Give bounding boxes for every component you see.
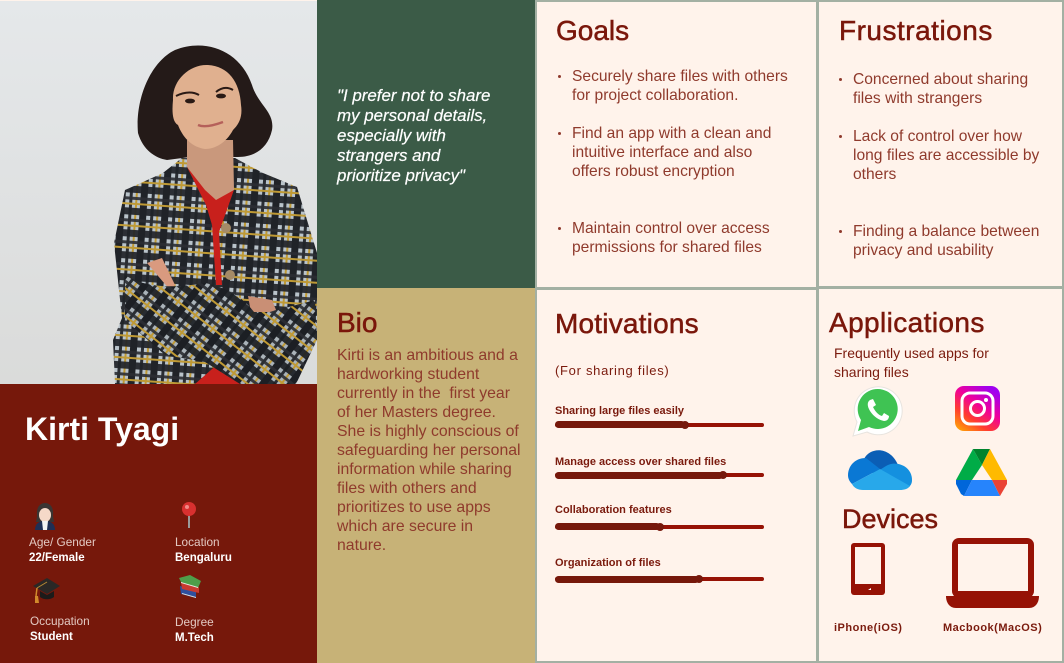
bio text: safeguarding her personal [337, 442, 521, 459]
slider: collaboration: Collaboration features [555, 504, 672, 516]
quote text: my personal details, [337, 106, 487, 125]
frustrations heading: Frustrations [839, 15, 993, 46]
quote text: especially with [337, 126, 446, 145]
bio text: files with others and [337, 480, 477, 497]
name: Kirti Tyagi [25, 411, 179, 447]
bio text: currently in the first year [337, 385, 510, 402]
applications subtitle [834, 345, 989, 380]
slider: organization [555, 557, 764, 583]
slider: sharing large files: Sharing large files easily [555, 405, 684, 417]
goal 3 [558, 220, 770, 256]
occupation [30, 614, 90, 643]
degree: M.Tech [175, 632, 214, 644]
frustration 1 [839, 71, 1028, 107]
panel: quote [317, 0, 535, 288]
frustration 2: others [853, 166, 896, 183]
frustration 2 [839, 128, 1040, 183]
degree: Degree [175, 615, 214, 629]
panel: frustrations [817, 0, 1064, 288]
photo: portrait of Kirti [0, 1, 317, 384]
quote text [336, 86, 490, 185]
motivations heading: Motivations [555, 308, 699, 339]
occupation: Occupation [30, 614, 90, 628]
devices heading: Devices [842, 504, 938, 534]
bio text: which are secure in [337, 518, 473, 535]
occupation: Student [30, 631, 73, 643]
goal 1 [558, 68, 788, 104]
location: Bengaluru [175, 552, 232, 564]
bio text: of her Masters degree. [337, 404, 496, 421]
bio text [337, 347, 521, 554]
icon: woman [35, 503, 55, 530]
icon: books [179, 575, 201, 598]
slider: sharing large files [555, 405, 764, 429]
icon: location pin [182, 502, 196, 528]
slider: manage access: Manage access over shared files [555, 456, 726, 468]
goal 3: Maintain control over access [572, 220, 770, 237]
bio text: nature. [337, 537, 386, 554]
frustration 3: Finding a balance between [853, 223, 1039, 240]
goal 2: intuitive interface and also [572, 144, 752, 161]
quote text: prioritize privacy" [337, 166, 465, 185]
goal 2 [558, 125, 771, 180]
age and gender: Age/ Gender [29, 535, 96, 549]
icon: Google Drive [956, 449, 1007, 496]
Macbook label: Macbook(MacOS) [943, 622, 1042, 634]
age and gender [29, 535, 96, 564]
slider: organization: Organization of files [555, 557, 661, 569]
location: Location [175, 535, 220, 549]
frustration 1: files with strangers [853, 90, 982, 107]
degree [175, 615, 214, 644]
panel: goals [535, 0, 818, 289]
bio text: information while sharing [337, 461, 512, 478]
icon: WhatsApp [852, 386, 903, 436]
frustration 3: privacy and usability [853, 242, 993, 259]
panel: applications and devices [817, 287, 1064, 663]
panel: name and demographics [0, 384, 317, 663]
goal 2: offers robust encryption [572, 163, 735, 180]
quote text: strangers and [337, 146, 440, 165]
motivations subtitle: (For sharing files) [555, 363, 669, 378]
applications heading: Applications [829, 307, 985, 338]
bio text: prioritizes to use apps [337, 499, 491, 516]
goal 2: Find an app with a clean and [572, 125, 771, 142]
goal 1: for project collaboration. [572, 87, 738, 104]
frustration 2: long files are accessible by [853, 147, 1039, 164]
panel: motivations [535, 288, 818, 663]
frustration 1: Concerned about sharing [853, 71, 1028, 88]
frustration 3 [839, 223, 1039, 259]
panel: bio [317, 288, 535, 663]
applications subtitle: sharing files [834, 364, 909, 380]
bio heading: Bio [337, 307, 377, 338]
age and gender: 22/Female [29, 552, 85, 564]
icon: OneDrive [848, 450, 912, 490]
bio text: hardworking student [337, 366, 479, 383]
quote text: "I prefer not to share [337, 86, 490, 105]
goal 1: Securely share files with others [572, 68, 788, 85]
icon: phone [851, 543, 885, 595]
bio text: She is highly conscious of [337, 423, 519, 440]
goal 3: permissions for shared files [572, 239, 762, 256]
icon: graduation cap [33, 578, 60, 603]
slider: manage access [555, 456, 764, 479]
frustration 2: Lack of control over how [853, 128, 1022, 145]
applications subtitle: Frequently used apps for [834, 345, 989, 361]
iPhone label: iPhone(iOS) [834, 622, 902, 634]
goals heading: Goals [556, 15, 629, 46]
icon: laptop [946, 538, 1039, 608]
bio text: Kirti is an ambitious and a [337, 347, 518, 364]
location [175, 535, 232, 564]
icon: Instagram [955, 386, 1000, 431]
slider: collaboration [555, 504, 764, 531]
